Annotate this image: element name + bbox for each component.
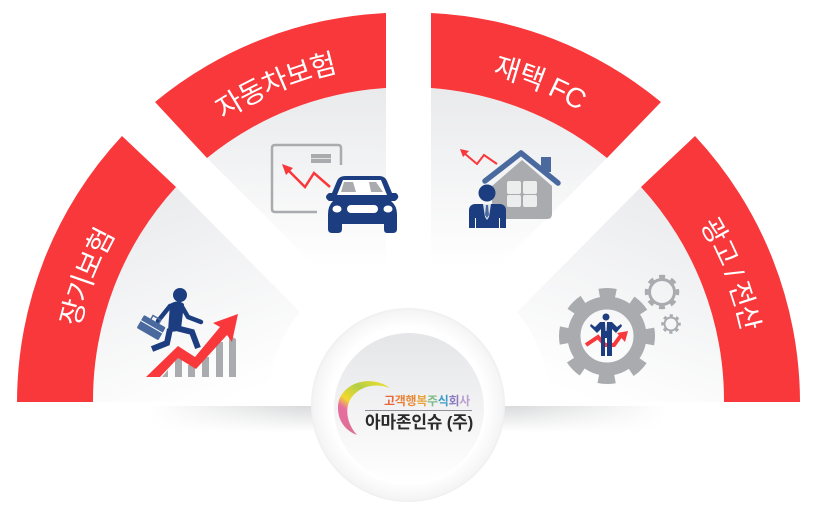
red heading band <box>431 13 661 158</box>
window <box>507 181 537 207</box>
panel: auto insurance sector <box>155 13 398 233</box>
heading: 광고 / 전산: 광고 / 전산 <box>702 216 763 329</box>
red heading band <box>17 136 176 402</box>
businessman <box>590 314 622 356</box>
sector background <box>207 88 386 284</box>
chart frame <box>272 145 341 212</box>
logo crescent <box>338 381 390 435</box>
small gear <box>662 316 680 332</box>
agent <box>469 184 506 228</box>
chimney <box>541 157 551 172</box>
shadow under centre <box>150 405 666 433</box>
briefcase <box>137 311 168 340</box>
icon: businessman climbing rising arrow <box>137 288 238 377</box>
inner disc <box>333 332 485 484</box>
logo <box>338 381 473 435</box>
red heading band <box>155 13 386 158</box>
panel: advertising and IT sector <box>540 136 800 402</box>
icon: gears and businessman <box>564 276 680 379</box>
logo company name: 아마존인슈 (주) <box>365 413 473 432</box>
panel: long-term insurance sector <box>17 136 276 402</box>
sector background <box>517 187 724 402</box>
red arrow <box>146 314 238 377</box>
logo slogan: 고객행복주식회사 <box>384 393 470 408</box>
heading: 장기보험: 장기보험 <box>59 226 116 324</box>
logo divider <box>365 410 472 411</box>
panel: home-based FC sector <box>431 13 661 228</box>
red falling arrow <box>464 153 497 164</box>
rising bars <box>162 335 236 377</box>
house body <box>492 160 552 219</box>
red heading band <box>641 136 800 402</box>
red falling arrow <box>287 169 330 187</box>
runner <box>152 288 201 349</box>
centre badge <box>311 308 505 502</box>
car <box>326 176 398 233</box>
red arrow <box>586 334 622 345</box>
icon: car and falling chart <box>272 145 398 233</box>
heading: 자동차보험: 자동차보험 <box>214 50 336 116</box>
roof <box>485 153 558 183</box>
chart label block <box>311 154 331 163</box>
sector background <box>431 88 607 282</box>
medium gear <box>646 276 678 308</box>
heading: 재택 FC: 재택 FC <box>494 56 586 108</box>
outer ring <box>311 308 505 502</box>
icon: agent and house <box>460 149 558 228</box>
sector background <box>93 187 300 402</box>
large gear <box>564 293 650 379</box>
